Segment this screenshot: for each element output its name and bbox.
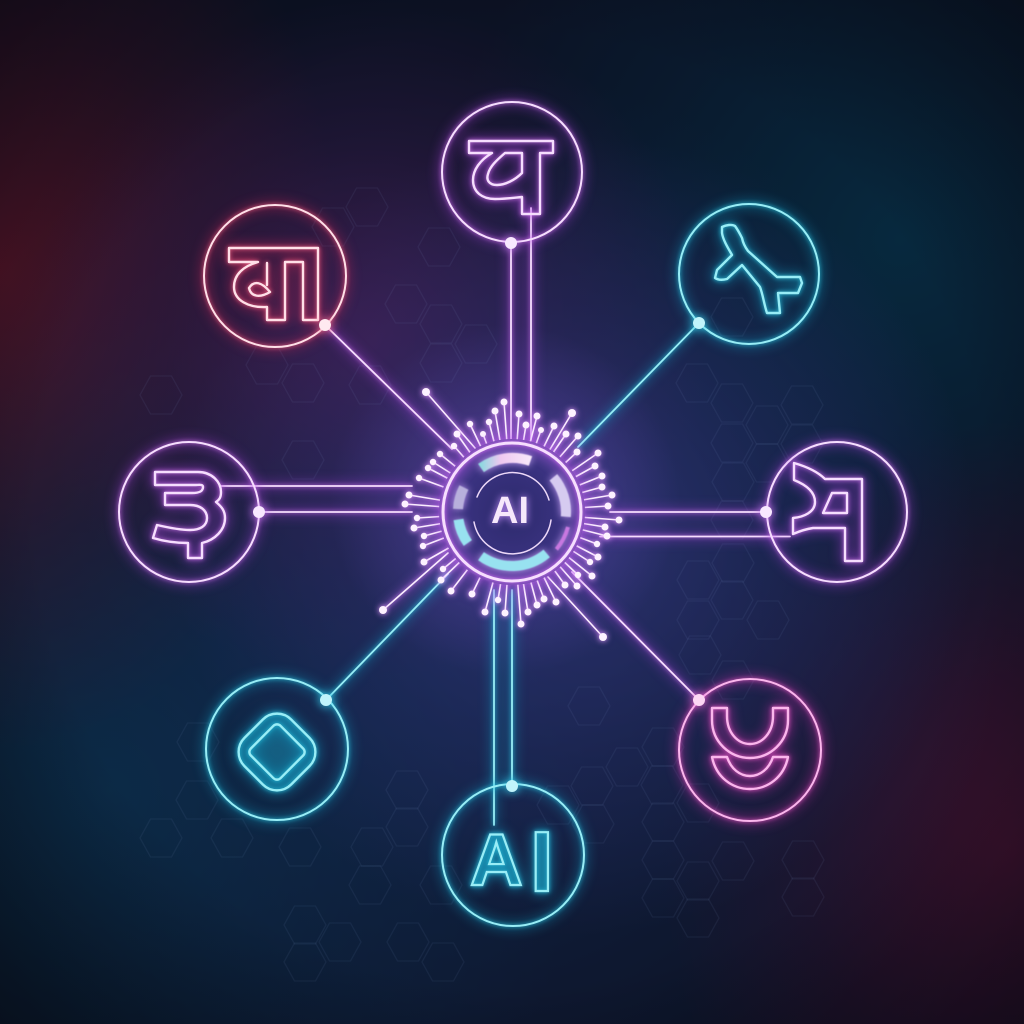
- hub segmented ring: [458, 458, 568, 566]
- hub outer ring: [443, 443, 581, 581]
- node: top-right: [679, 204, 819, 344]
- ring: [679, 679, 821, 821]
- AI label: I: [530, 815, 554, 910]
- connector: bottom: [494, 590, 512, 825]
- diamond icon: [230, 705, 324, 799]
- glyph icon: [715, 225, 802, 313]
- ring: [442, 102, 582, 242]
- node: bottom-right: [679, 679, 821, 821]
- node: left: [119, 442, 265, 582]
- ring: [442, 784, 584, 926]
- anchor dot: [693, 694, 705, 706]
- glyph icon: [229, 248, 318, 320]
- hexagon background pattern: [140, 188, 824, 981]
- anchor dot: [320, 694, 332, 706]
- anchor dot: [760, 506, 772, 518]
- connector: top-right: [578, 323, 699, 447]
- glyph icon: [712, 708, 788, 789]
- connector: bottom-left: [326, 574, 448, 700]
- anchor dot: [505, 237, 517, 249]
- ring: [767, 442, 907, 582]
- connector: right: [600, 512, 790, 536]
- node: bottom-left: [206, 678, 348, 820]
- anchor dot: [693, 317, 705, 329]
- node: top-left: [204, 205, 346, 347]
- ring: [206, 678, 348, 820]
- ring: [679, 204, 819, 344]
- anchor dot: [506, 780, 518, 792]
- node: right: [760, 442, 907, 582]
- anchor dot: [319, 319, 331, 331]
- AI label: A: [470, 820, 523, 901]
- hub disc: [439, 439, 585, 585]
- glyph icon: [469, 141, 553, 214]
- glyph icon: [793, 463, 862, 561]
- node: top: [442, 102, 582, 249]
- hub label: AI: [491, 490, 529, 532]
- hub radial ticks: [379, 388, 622, 641]
- connector: top: [511, 208, 531, 440]
- ring: [204, 205, 346, 347]
- node: bottom: [442, 780, 584, 926]
- connector lines from hub to nodes: [221, 208, 790, 825]
- hub inner thin ring: [474, 473, 551, 554]
- connector: left: [221, 486, 412, 512]
- central AI hub: [379, 388, 622, 641]
- glyph icon: [153, 472, 225, 558]
- ring: [119, 442, 259, 582]
- connector: top-left: [325, 325, 452, 449]
- connector: bottom-right: [572, 572, 699, 700]
- anchor dot: [253, 506, 265, 518]
